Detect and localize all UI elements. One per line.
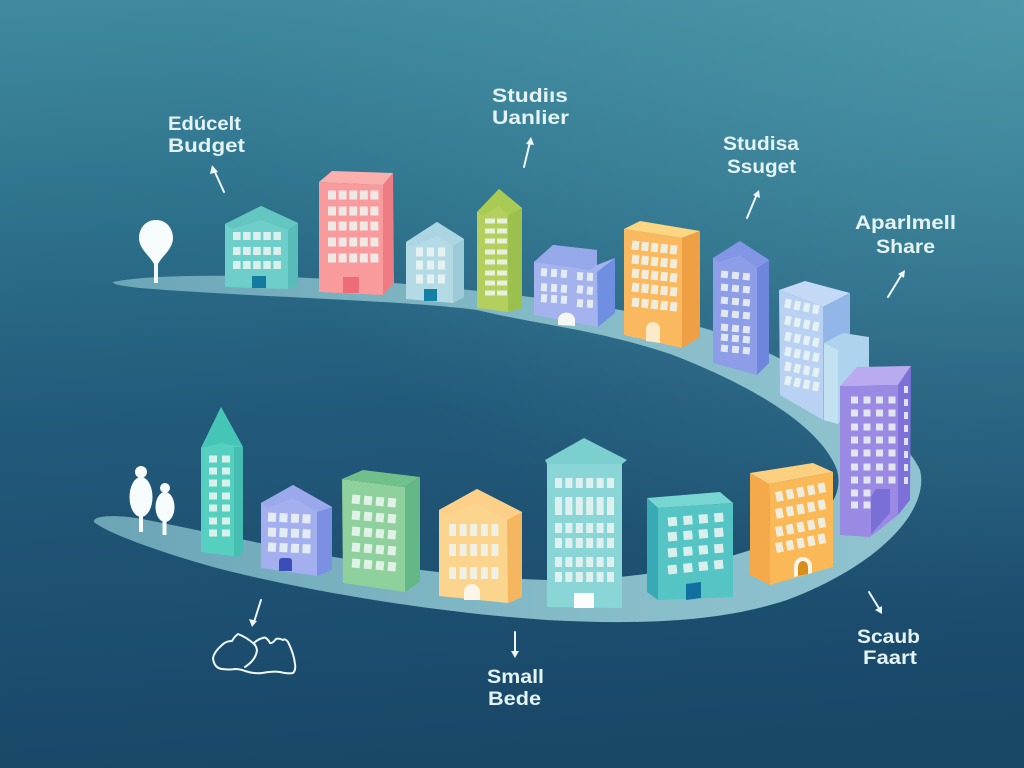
icon: cloud outline: [213, 634, 295, 673]
icon: two figure trees: [130, 466, 174, 535]
building: periwinkle stepped block: [534, 245, 615, 327]
label: Studiıs Uanlier: Studiıs: [492, 85, 568, 107]
arrow: to Studiıs Uanlier: [524, 137, 534, 167]
label: Small Bede: Small: [487, 666, 544, 688]
building: orange tower: [624, 221, 700, 348]
arrow: to Scaub Faart: [869, 592, 882, 614]
label: Edúcelt Budget: Edúcelt: [168, 113, 242, 135]
label: Scaub Faart: Scaub: [857, 626, 920, 648]
building: teal spire tower: [201, 407, 243, 557]
label: Aparlmell Share: [855, 212, 956, 258]
curved street ribbon: [94, 276, 921, 622]
arrow: to Small Bede: [511, 632, 519, 658]
label: Studisa Ssuget: [723, 133, 799, 178]
label: Studiıs Uanlier: [492, 85, 569, 129]
arrow: to Aparlmell Share: [888, 270, 905, 297]
building: light blue house: [406, 222, 464, 303]
building: dark teal block: [647, 492, 733, 600]
label: Studisa Ssuget: Ssuget: [727, 156, 797, 178]
label: Small Bede: Bede: [488, 688, 541, 710]
building: purple tower with door: [840, 366, 911, 537]
arrow: to cloud icon: [249, 600, 261, 627]
label: Aparlmell Share: Aparlmell: [855, 212, 956, 234]
icon: balloon tree: [139, 220, 173, 283]
label: Edúcelt Budget: Budget: [168, 135, 246, 157]
arrow: to Edúcelt Budget: [210, 165, 224, 192]
label: Aparlmell Share: Share: [876, 236, 935, 258]
label: Scaub Faart: [857, 626, 920, 669]
building: green tower: [477, 189, 522, 312]
label: Studisa Ssuget: Studisa: [723, 133, 799, 155]
label: Scaub Faart: Faart: [863, 647, 918, 669]
building: pink tower: [319, 171, 394, 295]
building: yellow house: [439, 489, 522, 603]
arrow: to Studisa Ssuget: [747, 190, 760, 218]
building: pale teal tall tower: [545, 438, 627, 608]
building: pale blue block with annex: [779, 281, 869, 424]
building: green block: [342, 470, 420, 592]
building: teal house: [225, 206, 298, 289]
building: periwinkle tall house: [713, 241, 769, 375]
label: Small Bede: [487, 666, 544, 710]
building: orange block: [750, 463, 833, 585]
label: Studiıs Uanlier: Uanlier: [492, 107, 569, 129]
label: Edúcelt Budget: [168, 113, 246, 157]
building: periwinkle house lower: [261, 485, 332, 576]
